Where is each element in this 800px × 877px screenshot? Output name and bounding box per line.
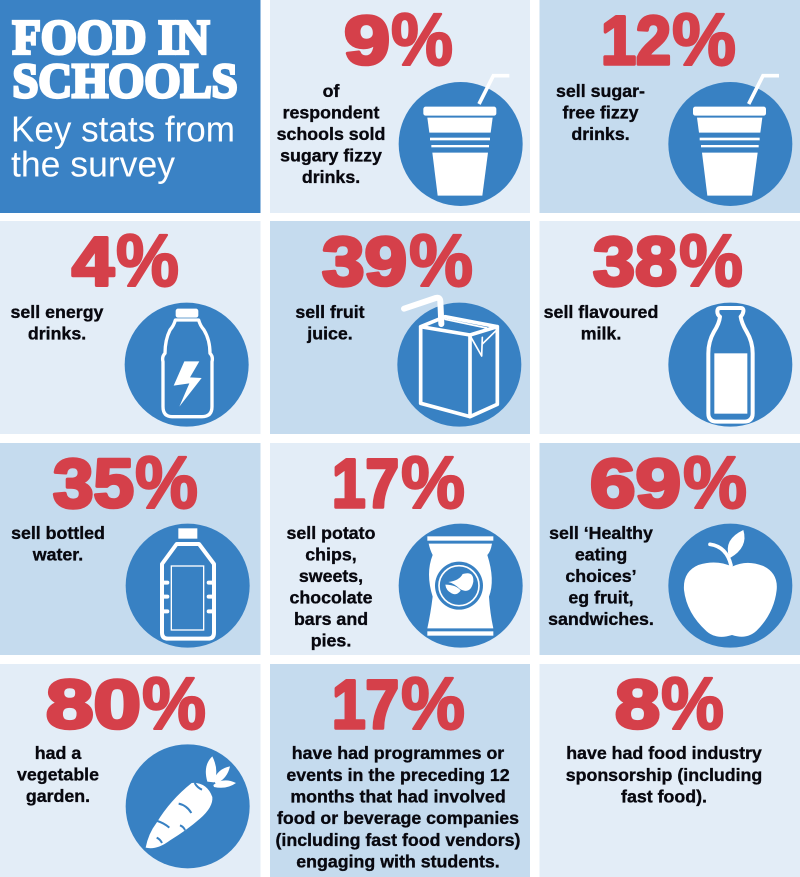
subheading: key stats <box>11 108 235 184</box>
panel: healthy eating choices <box>540 441 800 655</box>
caption: flavoured milk: milk. <box>581 324 621 344</box>
subheading: key stats: the survey <box>11 144 175 184</box>
caption: vegetable garden: had a <box>35 743 81 763</box>
caption: potato chips, sweets, chocolate bars and pies: sweets, <box>299 566 363 586</box>
stat: 38%: % <box>679 219 743 302</box>
caption: potato chips, sweets, chocolate bars and pies: pies. <box>311 630 351 650</box>
stat: 38%: 38 <box>593 223 677 300</box>
caption: flavoured milk: sell flavoured <box>544 302 658 322</box>
caption: healthy eating choices: sell ‘Healthy <box>549 523 653 543</box>
stat: 4% <box>72 219 179 302</box>
stat: 9%: 9 <box>344 2 390 79</box>
icon: carrot <box>126 744 250 868</box>
panel: food industry sponsorship <box>540 662 800 877</box>
icon: milk bottle <box>668 303 792 427</box>
icon: water bottle <box>126 524 250 648</box>
stat: 80% <box>46 662 206 745</box>
stat: 12%: % <box>672 0 736 81</box>
panel: fruit juice <box>270 219 530 434</box>
stat: 17% <box>332 441 465 524</box>
panel: vegetable garden <box>0 662 260 877</box>
caption: healthy eating choices: sandwiches. <box>548 609 654 629</box>
caption: potato chips, sweets, chocolate bars and pies: sell potato <box>287 523 376 543</box>
caption: programmes and events: food or beverage companies <box>277 808 519 828</box>
caption: fruit juice: juice. <box>306 324 353 344</box>
caption: programmes and events: (including fast food vendors) <box>276 830 521 850</box>
subheading: key stats: Key stats from <box>11 108 235 150</box>
caption: bottled water: water. <box>32 544 83 564</box>
stat: 9%: % <box>391 0 453 81</box>
panel: title <box>0 0 260 213</box>
stat: 9% <box>344 0 453 81</box>
caption: vegetable garden: vegetable <box>17 764 99 784</box>
panel: sugar-free fizzy drinks <box>540 0 800 213</box>
caption: sugar-free fizzy drinks: sell sugar- <box>556 81 645 101</box>
caption: bottled water: sell bottled <box>11 523 105 543</box>
caption: food industry sponsorship: fast food). <box>621 786 707 806</box>
stat: 39% <box>322 219 473 302</box>
stat: 80%: 80 <box>46 666 141 743</box>
caption: programmes and events: events in the preceding 12 <box>286 765 510 785</box>
heading: Food in Schools: SCHOOLS <box>12 53 238 108</box>
caption: potato chips, sweets, chocolate bars and pies: chocolate <box>289 588 373 608</box>
stat: 17%: 17 <box>332 666 399 743</box>
icon: cup with straw <box>399 76 523 206</box>
stat: 17% <box>332 662 465 745</box>
caption: energy drinks: drinks. <box>28 324 86 344</box>
stat: 39%: 39 <box>322 223 407 300</box>
icon: apple <box>668 524 792 648</box>
stat: 8% <box>615 662 724 745</box>
heading: Food in Schools <box>12 10 238 108</box>
stat: 69%: % <box>683 441 747 524</box>
caption: fruit juice: sell fruit <box>295 302 365 322</box>
stat: 8%: % <box>661 662 724 745</box>
stat: 17%: % <box>401 662 465 745</box>
panel: flavoured milk <box>540 219 800 434</box>
caption: sugar-free fizzy drinks: drinks. <box>571 124 630 144</box>
caption: energy drinks: sell energy <box>11 302 104 322</box>
stat: 12% <box>601 0 736 81</box>
caption: programmes and events: engaging with students. <box>296 852 500 872</box>
stat: 69% <box>590 441 747 524</box>
icon: chip bag <box>399 524 523 648</box>
stat: 69%: 69 <box>590 445 681 522</box>
stat: 39%: % <box>409 219 473 302</box>
caption: sugary fizzy drinks: respondent <box>283 102 379 122</box>
panel: energy drinks <box>0 219 260 434</box>
stat: 12%: 12 <box>601 2 671 79</box>
caption: healthy eating choices: eg fruit, <box>568 588 634 608</box>
stat: 38% <box>593 219 743 302</box>
panel: sugary fizzy drinks <box>270 0 530 213</box>
stat: 17%: % <box>401 441 465 524</box>
caption: sugary fizzy drinks: sugary fizzy <box>280 146 382 166</box>
caption: food industry sponsorship: have had food industry <box>566 743 762 763</box>
caption: sugary fizzy drinks: drinks. <box>302 167 360 187</box>
caption: sugary fizzy drinks: schools sold <box>277 124 385 144</box>
caption: sugar-free fizzy drinks: free fizzy <box>562 102 639 122</box>
icon: energy drink bottle <box>125 303 249 427</box>
caption: sugary fizzy drinks: of <box>323 81 339 101</box>
icon: cup with straw <box>668 76 792 206</box>
stat: 35%: 35 <box>53 445 134 522</box>
panel: programmes and events <box>270 662 530 877</box>
stat: 8%: 8 <box>615 666 660 743</box>
stat: 35%: % <box>135 441 198 524</box>
stat: 4%: % <box>116 219 179 302</box>
stat: 17%: 17 <box>332 445 399 522</box>
caption: food industry sponsorship: sponsorship (including <box>566 765 762 785</box>
caption: programmes and events: have had programmes or <box>292 743 504 763</box>
icon: juice box with straw <box>397 298 521 427</box>
caption: healthy eating choices: choices’ <box>565 566 637 586</box>
stat: 4%: 4 <box>72 223 114 300</box>
caption: potato chips, sweets, chocolate bars and pies: bars and <box>294 609 368 629</box>
caption: potato chips, sweets, chocolate bars and pies: chips, <box>305 544 357 564</box>
heading: Food in Schools: FOOD IN <box>12 10 210 64</box>
panel: potato chips and sweets <box>270 441 530 655</box>
caption: healthy eating choices: eating <box>575 544 627 564</box>
stat: 80%: % <box>142 662 206 745</box>
caption: programmes and events: months that had involved <box>290 786 506 806</box>
caption: vegetable garden: garden. <box>26 786 90 806</box>
panel: bottled water <box>0 441 260 655</box>
stat: 35% <box>53 441 198 524</box>
